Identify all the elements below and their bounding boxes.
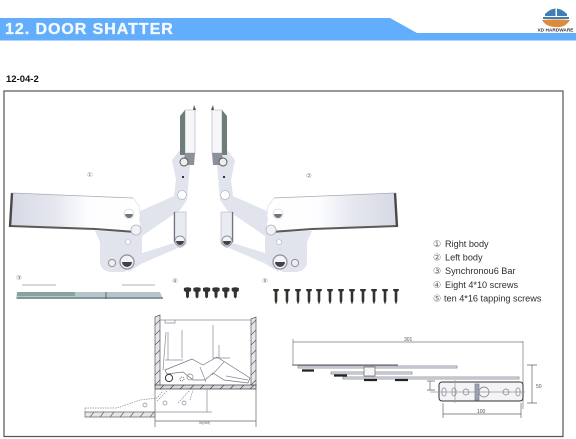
title: 12. DOOR SHATTER xyxy=(5,21,174,38)
screws: eight 4*10 xyxy=(184,287,239,298)
left hinge photo xyxy=(10,105,196,272)
dimension labels: plan drawing xyxy=(404,337,542,415)
icon: XD Hardware logo: XD HARDWARE xyxy=(538,28,574,32)
right hinge photo xyxy=(211,105,397,272)
parts legend: ① xyxy=(433,239,441,249)
dimension labels: plan drawing: 301 xyxy=(404,337,413,343)
parts legend: Right body xyxy=(445,239,489,249)
part marker numbers xyxy=(16,172,312,285)
dimension label: section drawing: W(MM) xyxy=(199,421,210,425)
parts legend: Synchronou6 Bar xyxy=(445,266,516,276)
parts legend: Eight 4*10 screws xyxy=(445,280,518,290)
part marker numbers: ② xyxy=(306,173,312,180)
part marker numbers: ⑤ xyxy=(262,278,268,285)
dimension labels: plan drawing: 100 xyxy=(477,409,486,415)
parts legend: ④ xyxy=(433,280,441,290)
section drawing xyxy=(85,315,256,427)
parts legend xyxy=(433,239,542,304)
part marker numbers: ④ xyxy=(172,278,178,285)
part marker numbers: ① xyxy=(87,172,93,179)
plan drawing xyxy=(292,339,537,418)
screws: ten 4*16 tapping xyxy=(273,289,399,304)
parts legend: ten 4*16 tapping screws xyxy=(444,294,542,304)
part marker numbers: ③ xyxy=(16,275,22,282)
parts legend: ③ xyxy=(433,266,441,276)
dimension labels: plan drawing: 50 xyxy=(536,384,542,390)
header banner xyxy=(0,18,576,40)
icon: XD Hardware logo xyxy=(538,5,574,32)
parts legend: ② xyxy=(433,252,441,262)
panel: product frame xyxy=(4,91,563,436)
parts legend: Left body xyxy=(445,252,483,262)
synchronous bar photo xyxy=(16,285,163,299)
model number: 12-04-2 xyxy=(6,74,39,85)
parts legend: ⑤ xyxy=(433,294,441,304)
